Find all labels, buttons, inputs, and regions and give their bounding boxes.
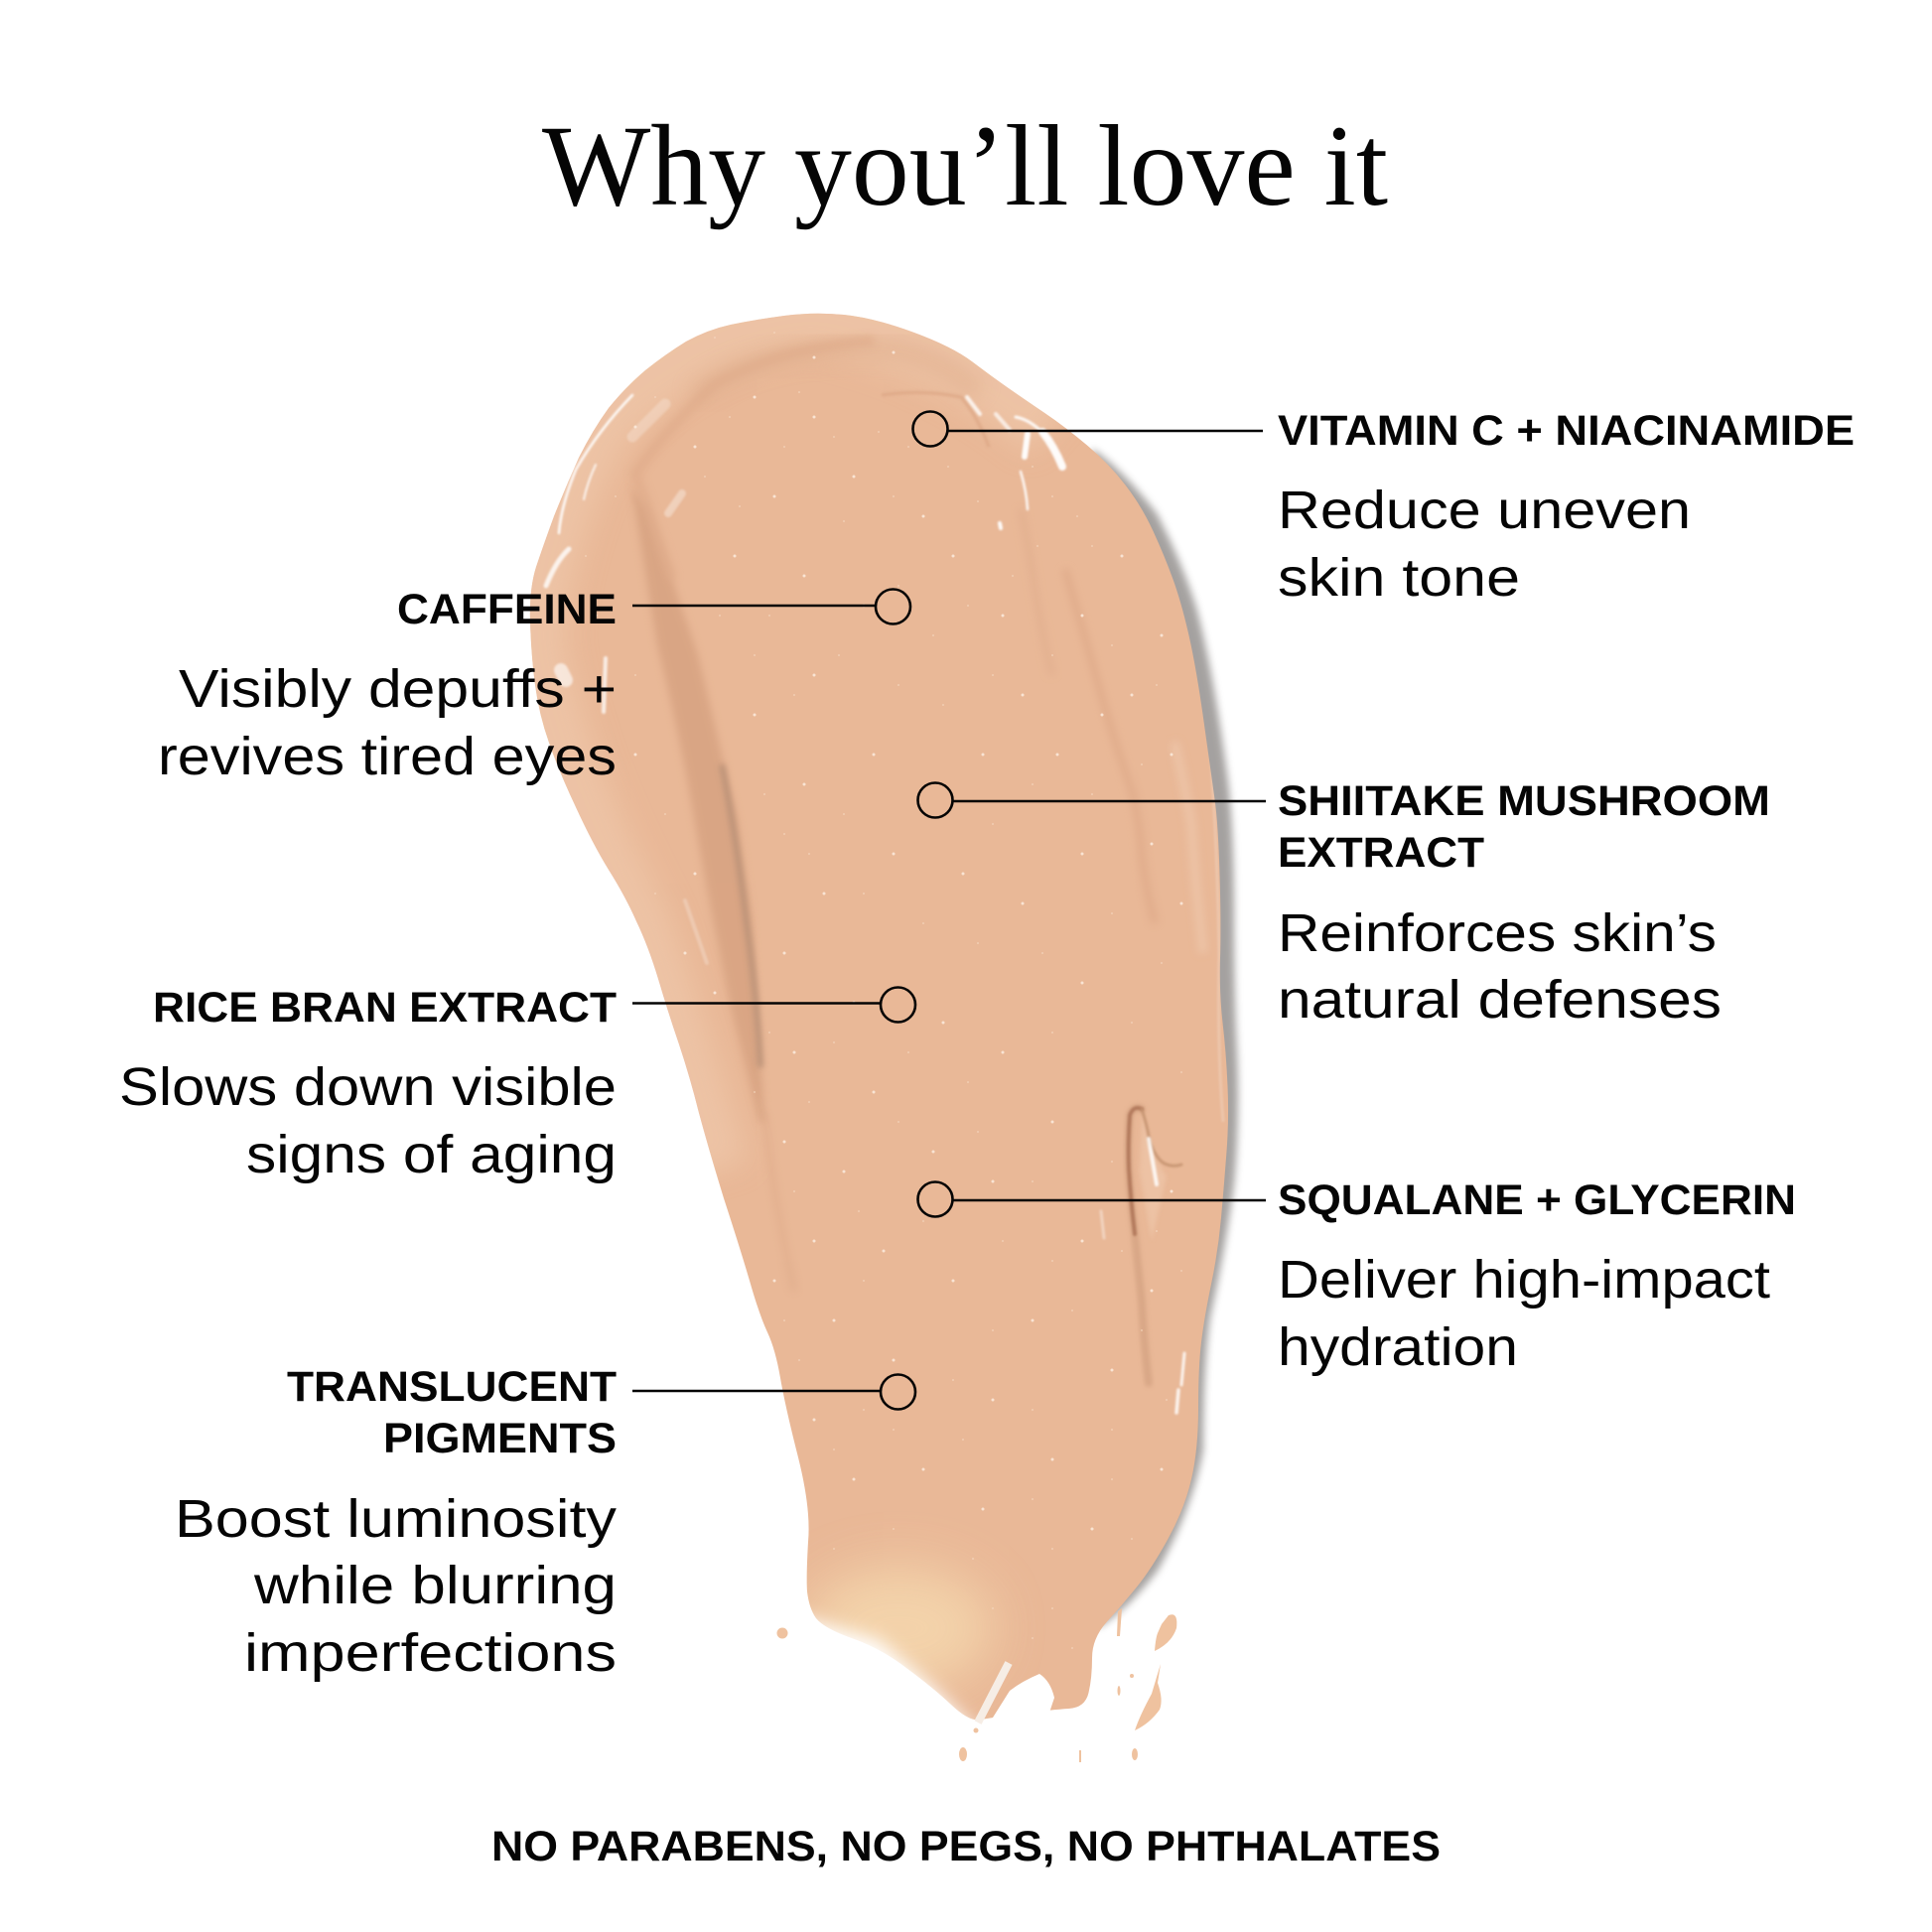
callout: translucent pigments marker [632,1374,915,1410]
shimmer particles [586,333,1181,1648]
product swatch: concealer smear [530,314,1238,1762]
text: rice bran extract: RICE BRAN EXTRACT [153,984,617,1032]
text: translucent pigments: while blurring [253,1556,617,1615]
text: rice bran extract [119,984,617,1184]
text: squalane + glycerin: Deliver high-impact [1278,1250,1770,1310]
text: translucent pigments: Boost luminosity [175,1489,617,1549]
skin-fold crease with hook [1129,1108,1181,1383]
swatch shading [531,314,1223,1690]
text: squalane + glycerin [1278,1176,1796,1377]
text: rice bran extract: Slows down visible [119,1057,617,1117]
text: shiitake mushroom extract [1278,777,1770,1030]
callout: vitamin C + niacinamide marker [913,411,1263,447]
text: shiitake mushroom extract: EXTRACT [1278,829,1484,877]
text: translucent pigments: TRANSLUCENT [287,1363,617,1411]
callout: shiitake marker [917,782,1266,818]
text: squalane + glycerin: SQUALANE + GLYCERIN [1278,1176,1796,1224]
swatch body [530,314,1228,1720]
callout: squalane marker [917,1181,1266,1217]
bottom fade to white [794,1616,978,1757]
text: vitamin C + niacinamide: Reduce uneven [1278,481,1691,540]
text: shiitake mushroom extract: SHIITAKE MUSHROOM [1278,777,1770,825]
title: Why you’ll love it [542,102,1388,230]
footer claim: NO PARABENS, NO PEGS, NO PHTHALATES [491,1823,1441,1870]
text: shiitake mushroom extract: Reinforces skin’s [1278,903,1717,963]
swatch drop shadow [1042,449,1238,1628]
glossy highlights [546,395,1184,1413]
text: vitamin C + niacinamide: VITAMIN C + NIACINAMIDE [1278,407,1855,455]
text: vitamin C + niacinamide [1278,407,1855,608]
paint splatters [776,1608,1176,1762]
text: translucent pigments: imperfections [244,1623,617,1683]
text: translucent pigments [175,1363,617,1683]
text: translucent pigments: PIGMENTS [383,1415,617,1462]
text: squalane + glycerin: hydration [1278,1317,1518,1377]
text: rice bran extract: signs of aging [246,1125,617,1184]
text: caffeine: revives tired eyes [158,727,617,786]
text: caffeine: Visibly depuffs + [179,659,617,719]
text: caffeine: CAFFEINE [397,586,617,633]
callout: rice bran marker [632,987,915,1023]
bottom white gap and pale streak [953,1663,1092,1747]
callout: caffeine marker [632,590,910,623]
text: vitamin C + niacinamide: skin tone [1278,548,1520,608]
text: shiitake mushroom extract: natural defenses [1278,970,1722,1030]
text: caffeine [158,586,617,786]
